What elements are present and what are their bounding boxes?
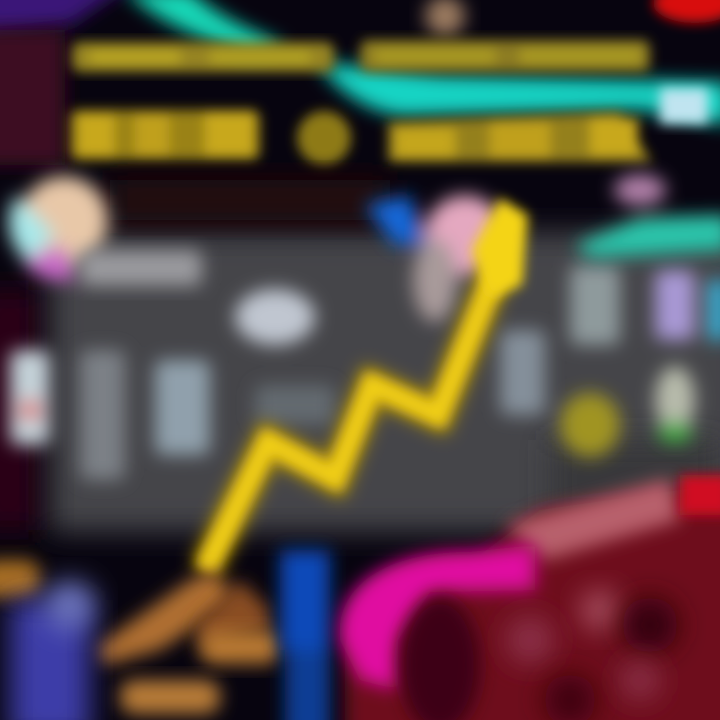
tile: left column bbox=[10, 350, 50, 445]
magenta ring bbox=[340, 545, 535, 690]
tile: yellow accent bbox=[560, 393, 620, 457]
blue column bbox=[280, 550, 330, 720]
magenta and crimson ribbon bbox=[340, 475, 720, 720]
pale ribbon end bbox=[660, 88, 708, 124]
coin stacks bbox=[0, 560, 280, 714]
tile: green accent bbox=[655, 366, 695, 434]
title line one bbox=[72, 42, 334, 72]
upper ribbon arc bbox=[125, 0, 285, 55]
crimson base bbox=[345, 480, 720, 720]
title large word right bbox=[388, 112, 652, 162]
background colour fields bbox=[0, 0, 720, 530]
cyan ribbon bbox=[125, 0, 720, 125]
title central emblem bbox=[297, 111, 351, 165]
crimson highlights bbox=[580, 590, 620, 630]
pink upper ribbon bbox=[505, 478, 680, 560]
grey dashboard panel bbox=[50, 180, 720, 532]
red corner bbox=[680, 475, 720, 515]
blue marker and pastel burst bbox=[365, 195, 505, 322]
dark ring centre bbox=[400, 597, 480, 720]
data tiles bbox=[10, 265, 720, 480]
tile: lower centre bbox=[255, 385, 335, 425]
tile: top centre bbox=[235, 289, 315, 345]
title large word left bbox=[70, 110, 260, 160]
lower ribbon band bbox=[318, 62, 720, 125]
tile: right of line bbox=[500, 330, 545, 415]
cyan bar upper right bbox=[575, 174, 720, 258]
title bbox=[70, 40, 652, 165]
rising yellow trend arrow bbox=[205, 198, 528, 570]
title line two bbox=[360, 40, 650, 72]
lower left blue glow bbox=[10, 581, 94, 720]
left coloured badge bbox=[9, 176, 202, 286]
